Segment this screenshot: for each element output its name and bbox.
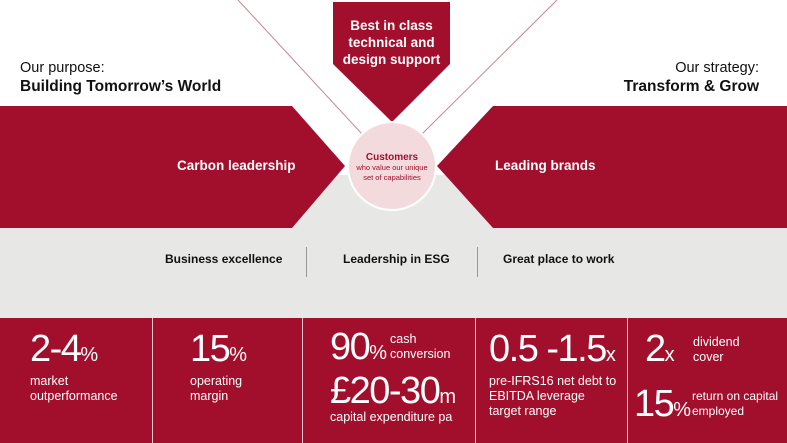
bottom band [0,318,787,443]
kpi 5: cover [693,350,724,364]
kpi 1 [30,328,118,403]
kpi 6 [634,383,778,425]
kpi 4: 0.5 -1.5x [489,328,614,370]
kpi 2: 15% [190,328,246,370]
kpi 5: 2x [645,328,673,370]
customers circle text [356,152,428,182]
left chevron [0,106,345,228]
kpi 4: target range [489,404,556,418]
kpi 1: market [30,374,68,388]
right chevron [437,106,787,228]
text: Business excellence [165,252,282,266]
top arrow text: Best in class technical and design support [343,18,440,67]
kpi 6: 15% [634,383,690,425]
kpi 2: margin [190,389,228,403]
kpi 3: 90% [330,326,386,368]
customers circle text: Customers [366,152,418,163]
carbon leadership: Carbon leadership [177,158,296,173]
customers circle text: who value our unique [356,163,428,172]
text: Great place to work [503,252,614,266]
kpi 4 [489,328,616,418]
kpi 4: EBITDA leverage [489,389,585,403]
kpi 2: operating [190,374,242,388]
text: Leadership in ESG [343,252,450,266]
kpi 2 [190,328,246,403]
kpi 1: outperformance [30,389,118,403]
kpi 1: 2-4% [30,328,97,370]
kpi 6: employed [692,404,744,418]
strategy [624,60,760,95]
circle [348,122,436,210]
kpi 3: capital expenditure pa [330,410,452,424]
leading brands: Leading brands [495,158,596,173]
kpi 5: dividend [693,335,740,349]
strategy: Transform & Grow [624,78,759,95]
purpose: Our purpose: [20,60,105,76]
strategy: Our strategy: [675,60,759,76]
purpose [20,60,221,95]
top arrow [333,2,450,122]
kpi 4: pre-IFRS16 net debt to [489,374,616,388]
kpi 3: £20-30m [330,370,454,412]
kpi 5 [645,328,740,370]
customers circle text: set of capabilities [363,173,421,182]
purpose: Building Tomorrow’s World [20,78,221,95]
kpi 3: cash conversion [390,332,450,361]
pillars [165,252,614,266]
lines [238,0,557,134]
kpi 3 [330,326,455,424]
kpi 6: return on capital [692,389,778,403]
